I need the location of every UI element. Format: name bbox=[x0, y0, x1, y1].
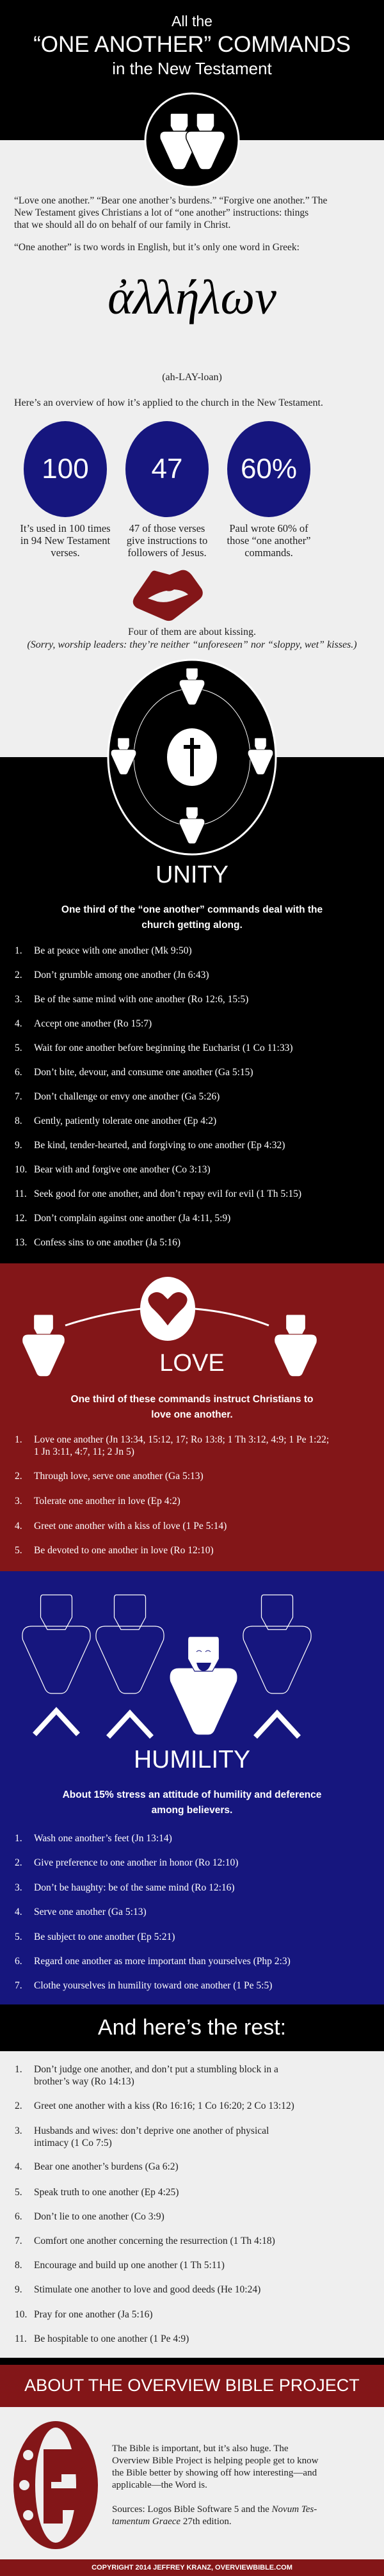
text: 6. bbox=[15, 1067, 22, 1078]
text: 10. bbox=[15, 1164, 27, 1175]
humility subheading: About 15% stress an attitude of humility and deference bbox=[63, 1789, 321, 1800]
text: Tolerate one another in love (Ep 4:2) bbox=[34, 1496, 180, 1507]
unity subheading bbox=[61, 904, 323, 931]
text: Encourage and build up one another (1 Th 5:11) bbox=[34, 2260, 225, 2271]
text: 3. bbox=[15, 2125, 22, 2136]
header band bbox=[0, 0, 384, 140]
text: Wait for one another before beginning the Eucharist (1 Co 11:33) bbox=[34, 1043, 293, 1053]
icon: two people logo bbox=[145, 93, 239, 187]
text: 4. bbox=[15, 1018, 22, 1029]
intro text: “Love one another.” “Bear one another’s burdens.” “Forgive one another.” The bbox=[14, 195, 327, 206]
text: 13. bbox=[15, 1237, 27, 1248]
text: 9. bbox=[15, 1140, 22, 1151]
love subheading bbox=[71, 1394, 313, 1420]
heading: about: ABOUT THE OVERVIEW BIBLE PROJECT bbox=[24, 2376, 360, 2395]
kissing note: (Sorry, worship leaders: they’re neither “unforeseen” nor “sloppy, wet” kisses.) bbox=[27, 639, 357, 650]
text: Don’t grumble among one another (Jn 6:43) bbox=[34, 970, 209, 980]
text: Husbands and wives: don’t deprive one another of physical bbox=[34, 2125, 269, 2136]
text: Clothe yourselves in humility toward one another (1 Pe 5:5) bbox=[34, 1980, 272, 1991]
text: 47 bbox=[152, 453, 182, 484]
footer band bbox=[0, 2559, 384, 2576]
title: All the bbox=[172, 13, 212, 29]
icon: unity circle bbox=[108, 660, 276, 854]
unity subheading: One third of the “one another” commands deal with the bbox=[61, 904, 323, 915]
text: Be hospitable to one another (1 Pe 4:9) bbox=[34, 2333, 189, 2344]
text: Don’t judge one another, and don’t put a stumbling block in a bbox=[34, 2064, 278, 2075]
about text: Sources: Logos Bible Software 5 and the Novum Tes- bbox=[112, 2504, 317, 2515]
text: 6. bbox=[15, 2211, 22, 2222]
copyright: COPYRIGHT 2014 JEFFREY KRANZ, OVERVIEWBIBLE.COM bbox=[92, 2564, 292, 2572]
love subheading: love one another. bbox=[151, 1409, 233, 1420]
text: commands. bbox=[244, 547, 293, 559]
text: Seek good for one another, and don’t repay evil for evil (1 Th 5:15) bbox=[34, 1188, 301, 1199]
text: 11. bbox=[15, 2333, 27, 2344]
love red band bbox=[0, 1263, 384, 1571]
text: Speak truth to one another (Ep 4:25) bbox=[34, 2187, 179, 2198]
text: Regard one another as more important than yourselves (Php 2:3) bbox=[34, 1956, 291, 1967]
text: 60% bbox=[241, 453, 297, 484]
text: Accept one another (Ro 15:7) bbox=[34, 1018, 152, 1029]
text: 7. bbox=[15, 1980, 22, 1991]
text: 2. bbox=[15, 970, 22, 980]
stat captions: verses. bbox=[51, 547, 80, 559]
about text: the Bible better by showing off how interesting—and bbox=[112, 2468, 317, 2478]
about text: tamentum Graece 27th edition. bbox=[112, 2516, 232, 2527]
text: 2. bbox=[15, 1857, 22, 1868]
text: 12. bbox=[15, 1213, 27, 1224]
text: 47 of those verses bbox=[129, 522, 205, 534]
text: Don’t complain against one another (Ja 4:11, 5:9) bbox=[34, 1213, 230, 1224]
unity list bbox=[15, 945, 301, 1248]
greek word: ἀλλήλων bbox=[108, 271, 276, 324]
kissing note bbox=[27, 627, 357, 650]
text: 2. bbox=[15, 1471, 22, 1482]
text: 1. bbox=[15, 1434, 22, 1445]
humility subheading: among believers. bbox=[152, 1805, 232, 1816]
icon: humility people bbox=[22, 1595, 311, 1737]
text: Bear one another’s burdens (Ga 6:2) bbox=[34, 2161, 179, 2172]
text: Stimulate one another to love and good deeds (He 10:24) bbox=[34, 2284, 260, 2295]
text: 1. bbox=[15, 1833, 22, 1844]
pronunciation: (ah-LAY-loan) bbox=[162, 372, 222, 383]
text: Greet one another with a kiss of love (1 Pe 5:14) bbox=[34, 1521, 227, 1532]
text: brother’s way (Ro 14:13) bbox=[34, 2076, 134, 2087]
about text: Overview Bible Project is helping people get to know bbox=[112, 2456, 318, 2466]
intro text: that we should all do on behalf of our family in Christ. bbox=[14, 220, 230, 230]
text: 1 Jn 3:11, 4:7, 11; 2 Jn 5) bbox=[34, 1446, 134, 1457]
humility list bbox=[15, 1833, 291, 1991]
icon: love people and heart bbox=[22, 1277, 317, 1377]
text: Don’t challenge or envy one another (Ga 5:26) bbox=[34, 1091, 220, 1102]
about red band bbox=[0, 2365, 384, 2407]
overview sentence: Here’s an overview of how it’s applied to the church in the New Testament. bbox=[14, 397, 323, 408]
text: intimacy (1 Co 7:5) bbox=[34, 2138, 112, 2148]
text: Don’t lie to one another (Co 3:9) bbox=[34, 2211, 164, 2222]
circle: 100 bbox=[24, 421, 107, 517]
text: Confess sins to one another (Ja 5:16) bbox=[34, 1237, 180, 1248]
title: “ONE ANOTHER” COMMANDS bbox=[33, 32, 351, 57]
text: 1. bbox=[15, 2064, 22, 2075]
title: in the New Testament bbox=[112, 59, 272, 78]
text: 7. bbox=[15, 2236, 22, 2246]
text: Don’t bite, devour, and consume one another (Ga 5:15) bbox=[34, 1067, 253, 1078]
kissing note: Four of them are about kissing. bbox=[128, 627, 256, 637]
text: Paul wrote 60% of bbox=[229, 522, 308, 534]
text: 7. bbox=[15, 1091, 22, 1102]
humility blue band bbox=[0, 1571, 384, 2004]
stat captions: It’s used in 100 times bbox=[20, 522, 111, 534]
love list bbox=[15, 1434, 329, 1556]
text: Be kind, tender-hearted, and forgiving to one another (Ep 4:32) bbox=[34, 1140, 285, 1151]
stat numbers: 100 bbox=[42, 453, 89, 484]
about text: applicable—the Word is. bbox=[112, 2480, 207, 2490]
intro text bbox=[14, 195, 327, 230]
rest list bbox=[15, 2064, 294, 2344]
icon: lips bbox=[133, 570, 203, 621]
heading: and here's the rest: And here’s the rest: bbox=[98, 2015, 286, 2040]
text: 4. bbox=[15, 1907, 22, 1917]
text: Don’t be haughty: be of the same mind (Ro 12:16) bbox=[34, 1882, 235, 1893]
heading: unity: UNITY bbox=[156, 861, 228, 888]
text: 3. bbox=[15, 994, 22, 1005]
text: Serve one another (Ga 5:13) bbox=[34, 1907, 147, 1917]
text: 4. bbox=[15, 1521, 22, 1532]
text: Wash one another’s feet (Jn 13:14) bbox=[34, 1833, 172, 1844]
text: 1. bbox=[15, 945, 22, 956]
text: Be at peace with one another (Mk 9:50) bbox=[34, 945, 192, 956]
title bbox=[33, 13, 351, 78]
text: those “one another” bbox=[227, 534, 311, 547]
text: Be devoted to one another in love (Ro 12:10) bbox=[34, 1545, 214, 1556]
text: 8. bbox=[15, 1116, 22, 1126]
text: 5. bbox=[15, 1545, 22, 1556]
heading: humility: HUMILITY bbox=[134, 1746, 250, 1773]
stat captions bbox=[20, 522, 111, 559]
text: Love one another (Jn 13:34, 15:12, 17; Ro 13:8; 1 Th 3:12, 4:9; 1 Pe 1:22; bbox=[34, 1434, 329, 1445]
about text: The Bible is important, but it’s also huge. The bbox=[112, 2444, 289, 2454]
text: 2. bbox=[15, 2100, 22, 2111]
text: 10. bbox=[15, 2309, 27, 2320]
intro text: New Testament gives Christians a lot of “one another” instructions: things bbox=[14, 207, 308, 218]
text: 4. bbox=[15, 2161, 22, 2172]
text: Bear with and forgive one another (Co 3:13) bbox=[34, 1164, 211, 1175]
text: Be of the same mind with one another (Ro 12:6, 15:5) bbox=[34, 994, 248, 1005]
text: Greet one another with a kiss (Ro 16:16; 1 Co 16:20; 2 Co 13:12) bbox=[34, 2100, 294, 2111]
text: 8. bbox=[15, 2260, 22, 2271]
icon: overview bible logo bbox=[13, 2421, 98, 2549]
text: 5. bbox=[15, 2187, 22, 2198]
stat captions: in 94 New Testament bbox=[20, 534, 110, 547]
text: Comfort one another concerning the resurrection (1 Th 4:18) bbox=[34, 2236, 275, 2246]
text: Be subject to one another (Ep 5:21) bbox=[34, 1932, 175, 1942]
text: give instructions to bbox=[127, 534, 207, 547]
circle: 60% bbox=[227, 421, 310, 517]
circle: 47 bbox=[125, 421, 209, 517]
unity subheading: church getting along. bbox=[141, 920, 243, 931]
text: 5. bbox=[15, 1932, 22, 1942]
text: Give preference to one another in honor (Ro 12:10) bbox=[34, 1857, 238, 1868]
text: 3. bbox=[15, 1496, 22, 1507]
about text bbox=[112, 2444, 319, 2527]
humility subheading bbox=[63, 1789, 321, 1816]
text: 11. bbox=[15, 1188, 27, 1199]
intro text 2: “One another” is two words in English, but it’s only one word in Greek: bbox=[14, 242, 300, 253]
text: 9. bbox=[15, 2284, 22, 2295]
unity black band bbox=[0, 757, 384, 1263]
text: 5. bbox=[15, 1043, 22, 1053]
love subheading: One third of these commands instruct Christians to bbox=[71, 1394, 313, 1405]
text: Through love, serve one another (Ga 5:13) bbox=[34, 1471, 204, 1482]
heading: love: LOVE bbox=[159, 1350, 225, 1377]
rest black band bbox=[0, 2004, 384, 2051]
text: Pray for one another (Ja 5:16) bbox=[34, 2309, 153, 2320]
text: 3. bbox=[15, 1882, 22, 1893]
text: 6. bbox=[15, 1956, 22, 1967]
text: Gently, patiently tolerate one another (Ep 4:2) bbox=[34, 1116, 216, 1126]
text: followers of Jesus. bbox=[127, 547, 207, 559]
